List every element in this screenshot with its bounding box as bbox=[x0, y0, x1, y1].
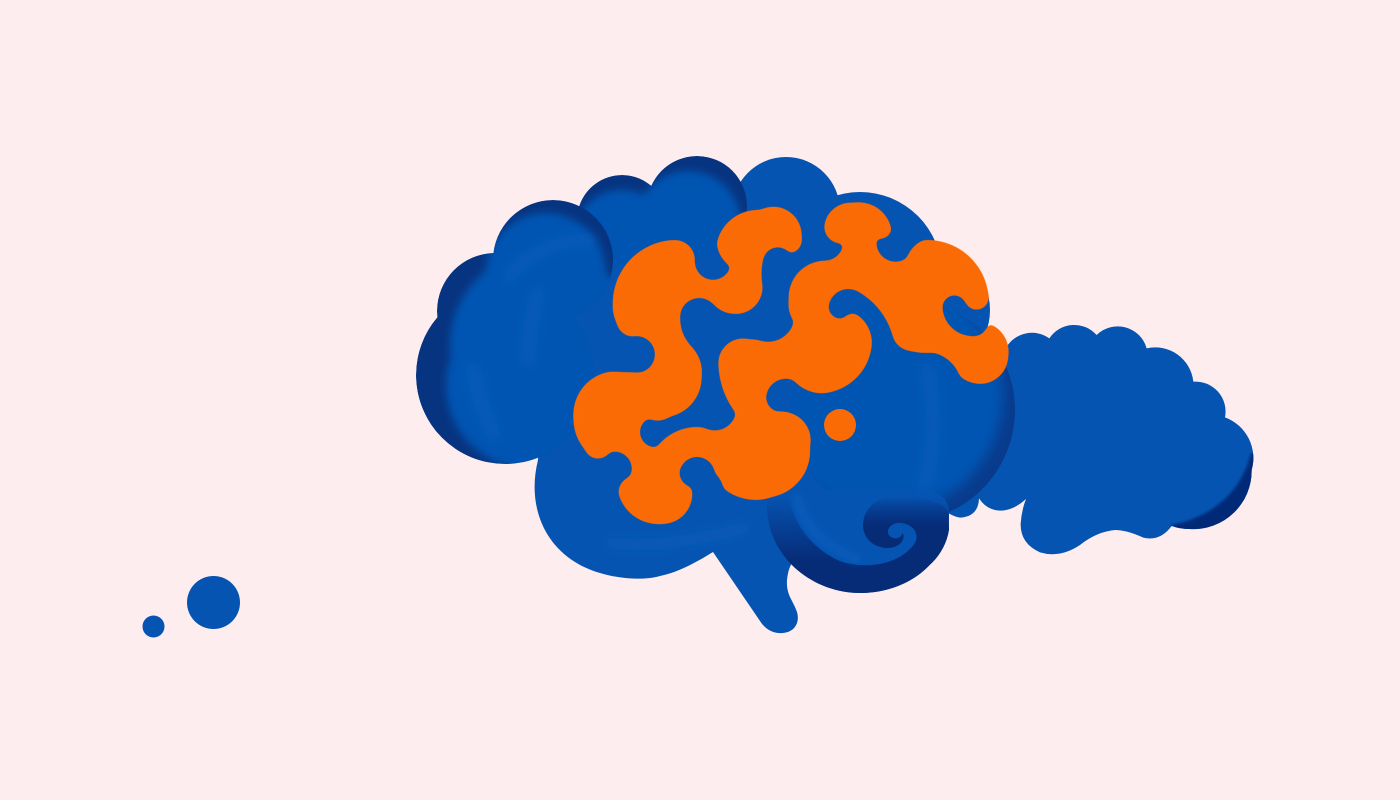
brain body bbox=[416, 156, 1015, 633]
isolated orange dot bbox=[824, 409, 856, 441]
top lobe lights bbox=[579, 168, 743, 265]
solid lobes bbox=[535, 157, 990, 579]
small thought dot bbox=[142, 616, 164, 638]
large thought dot bbox=[187, 576, 240, 629]
left lobe lights bbox=[442, 210, 612, 464]
brain stem bbox=[713, 500, 800, 633]
left lobes with shading bbox=[416, 156, 747, 469]
lobe shadows bbox=[416, 156, 747, 464]
cerebellum shadow bbox=[1170, 452, 1254, 530]
temporal outer shadow bbox=[767, 495, 949, 593]
temporal base bbox=[767, 490, 949, 593]
temporal highlight bbox=[797, 495, 860, 560]
illustration canvas bbox=[142, 156, 1254, 638]
painted highlights bbox=[473, 240, 933, 545]
temporal swirl shadow bbox=[860, 497, 949, 580]
right lobe with shadow bbox=[852, 320, 1015, 512]
upper-left lobe shadow bbox=[494, 200, 613, 284]
temporal lobe bbox=[767, 488, 949, 593]
cerebellum shape bbox=[940, 325, 1253, 554]
orange folds bbox=[573, 202, 1009, 524]
temporal swirl light bbox=[790, 488, 935, 565]
cerebellum cloud bbox=[940, 325, 1267, 554]
